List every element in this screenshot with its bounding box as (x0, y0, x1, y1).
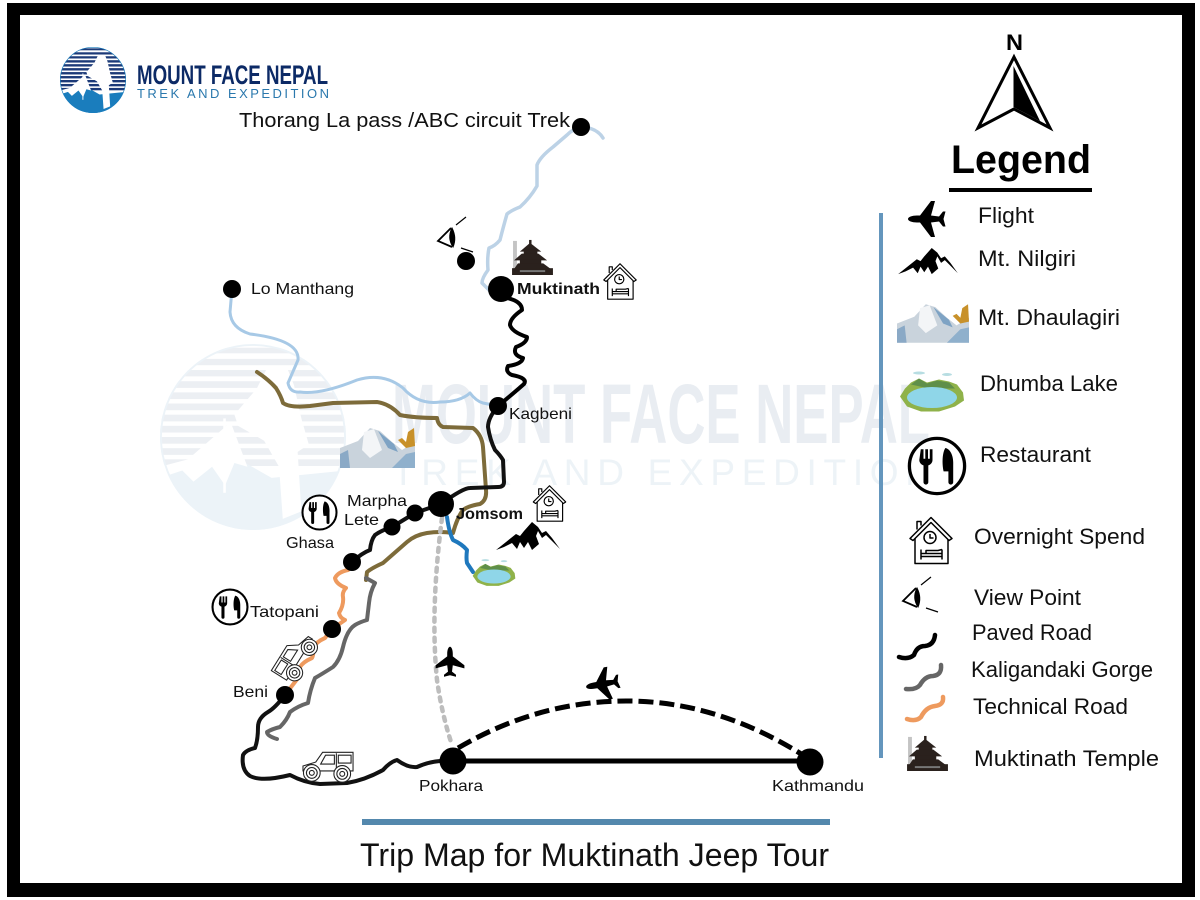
map labels: Lo Manthang (251, 281, 354, 298)
map labels: Kathmandu (772, 778, 864, 795)
logo mark (60, 47, 126, 113)
legend: Mt. Dhaulagiri: Mt. Dhaulagiri (978, 305, 1120, 330)
route stops (223, 118, 824, 776)
map labels: Marpha (347, 493, 407, 510)
paved road: Kagbeni to Ghasa (352, 406, 504, 562)
icon: Nilgiri on map (496, 522, 560, 550)
legend: Mt. Dhaulagiri (897, 304, 1120, 343)
legend: Mt. Nilgiri: Mt. Nilgiri (978, 246, 1076, 271)
icon: overnight at Muktinath (604, 264, 636, 299)
legend: Mt. Nilgiri (898, 246, 1076, 274)
legend: Kaligandaki Gorge (906, 657, 1153, 689)
trek route: Lo Manthang (230, 289, 498, 406)
icon: Dhaulagiri on map (340, 428, 415, 468)
paved road: Muktinath to Kagbeni (498, 297, 527, 406)
legend: Overnight Spend (910, 518, 1145, 564)
icon: restaurant near Marpha (302, 495, 337, 530)
icon: Dhumba Lake on map (473, 559, 515, 586)
north arrow (978, 30, 1050, 128)
legend: Overnight Spend: Overnight Spend (974, 524, 1145, 549)
legend: View Point: View Point (974, 585, 1081, 610)
company logo (60, 47, 329, 113)
map labels: Pokhara (419, 778, 483, 795)
icon: overnight at Jomsom (533, 486, 566, 521)
logo name: MOUNT FACE NEPAL (137, 60, 328, 90)
legend: Technical Road: Technical Road (973, 694, 1128, 719)
flight route arc dashed (458, 701, 806, 757)
legend: Muktinath Temple: Muktinath Temple (974, 746, 1159, 771)
map labels: Beni (233, 684, 268, 701)
legend: Paved Road: Paved Road (972, 620, 1092, 645)
map labels: Tatopani (250, 604, 319, 621)
watermark logo (160, 345, 932, 530)
legend: flight (908, 201, 1034, 237)
icon: plane above arc (583, 665, 622, 703)
legend: Dhumba Lake (900, 371, 1118, 412)
map labels: Lete (344, 512, 379, 529)
legend: Dhumba Lake: Dhumba Lake (980, 371, 1118, 396)
icon: jeep on technical road (271, 630, 322, 686)
river to Dhumba Lake (447, 517, 473, 572)
north arrow: N (1006, 30, 1023, 55)
logo tagline: TREK AND EXPEDITION (137, 86, 329, 101)
map labels (233, 110, 864, 795)
title rule (362, 819, 830, 825)
legend: Technical Road (907, 694, 1128, 720)
icon: restaurant at Tatopani (213, 590, 247, 624)
brown road (257, 372, 486, 580)
legend: Restaurant (909, 438, 1091, 494)
icon: jeep near Pokhara (303, 752, 353, 782)
icon: plane on flight path (436, 647, 464, 677)
title: Trip Map for Muktinath Jeep Tour (360, 837, 829, 873)
legend: Paved Road (899, 620, 1092, 658)
map labels: Kagbeni (509, 406, 572, 423)
road: Pokhara to Kathmandu (453, 758, 810, 764)
map labels: Thorang La pass /ABC circuit Trek (239, 110, 571, 132)
paved road: Beni to Pokhara (243, 695, 440, 784)
legend: Restaurant: Restaurant (980, 442, 1091, 467)
legend: Kaligandaki Gorge: Kaligandaki Gorge (971, 657, 1153, 682)
legend divider (879, 213, 883, 758)
legend: View Point (903, 577, 1081, 612)
gorge road (267, 578, 375, 739)
technical road (285, 570, 348, 695)
legend: flight: Flight (978, 203, 1034, 228)
watermark logo: TREK AND EXPEDITION (392, 452, 932, 493)
flight route dotted (434, 518, 452, 745)
icon: Muktinath temple on map (512, 240, 553, 275)
map labels: Jomsom (456, 506, 523, 523)
legend: Muktinath Temple (907, 736, 1159, 771)
legend heading: Legend (951, 138, 1091, 182)
map labels: Ghasa (286, 535, 334, 552)
trek route: Thorang La (482, 127, 603, 291)
map labels: Muktinath (517, 281, 600, 298)
icon: view point on map (438, 217, 473, 252)
